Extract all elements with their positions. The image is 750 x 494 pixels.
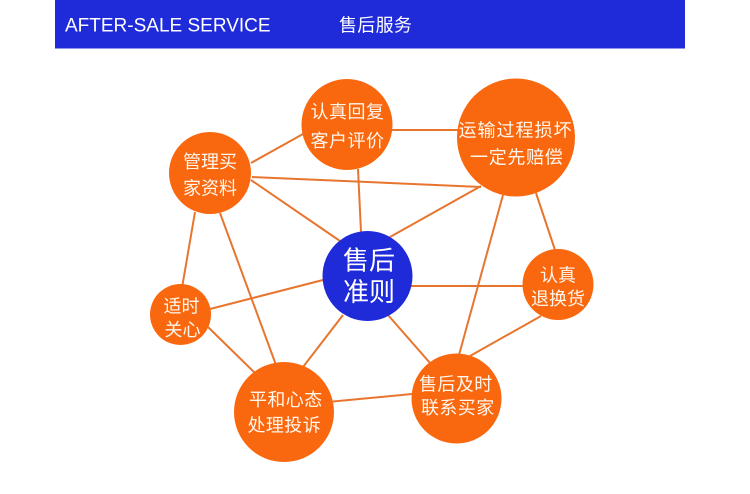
node: 适时关心 <box>150 284 211 345</box>
node: 认真回复客户评价: 认真回复 <box>310 102 384 122</box>
node: 管理买家资料: 管理买 <box>183 152 237 172</box>
header banner <box>55 0 685 48</box>
node: 认真退换货: 认真 <box>540 266 576 286</box>
header banner: AFTER-SALE SERVICE <box>65 16 271 36</box>
node: 适时关心: 关心 <box>164 320 200 340</box>
node: 适时关心: 适时 <box>164 296 200 316</box>
node: 运输过程损坏一定先赔偿 <box>457 78 575 196</box>
node: 认真回复客户评价: 客户评价 <box>310 131 384 151</box>
node: 管理买家资料: 家资料 <box>183 178 237 198</box>
center node: 售后准则: 售后 <box>343 246 395 276</box>
center node: 售后准则: 准则 <box>343 277 395 307</box>
node: 运输过程损坏一定先赔偿: 一定先赔偿 <box>470 148 564 168</box>
node: 平和心态处理投诉 <box>234 362 334 462</box>
header banner: 售后服务 <box>339 16 412 36</box>
node: 认真退换货 <box>522 249 594 320</box>
node: 售后及时联系买家 <box>412 354 502 444</box>
node: 认真退换货: 退换货 <box>531 289 585 309</box>
connecting lines network <box>182 130 555 402</box>
node: 售后及时联系买家: 联系买家 <box>421 398 495 418</box>
node: 平和心态处理投诉: 处理投诉 <box>248 416 321 436</box>
center node: 售后准则 <box>322 231 412 321</box>
node: 运输过程损坏一定先赔偿: 运输过程损坏 <box>458 120 572 140</box>
node: 平和心态处理投诉: 平和心态 <box>249 390 323 410</box>
node: 管理买家资料 <box>169 132 251 214</box>
node: 售后及时联系买家: 售后及时 <box>419 374 493 394</box>
node: 认真回复客户评价 <box>302 79 392 170</box>
